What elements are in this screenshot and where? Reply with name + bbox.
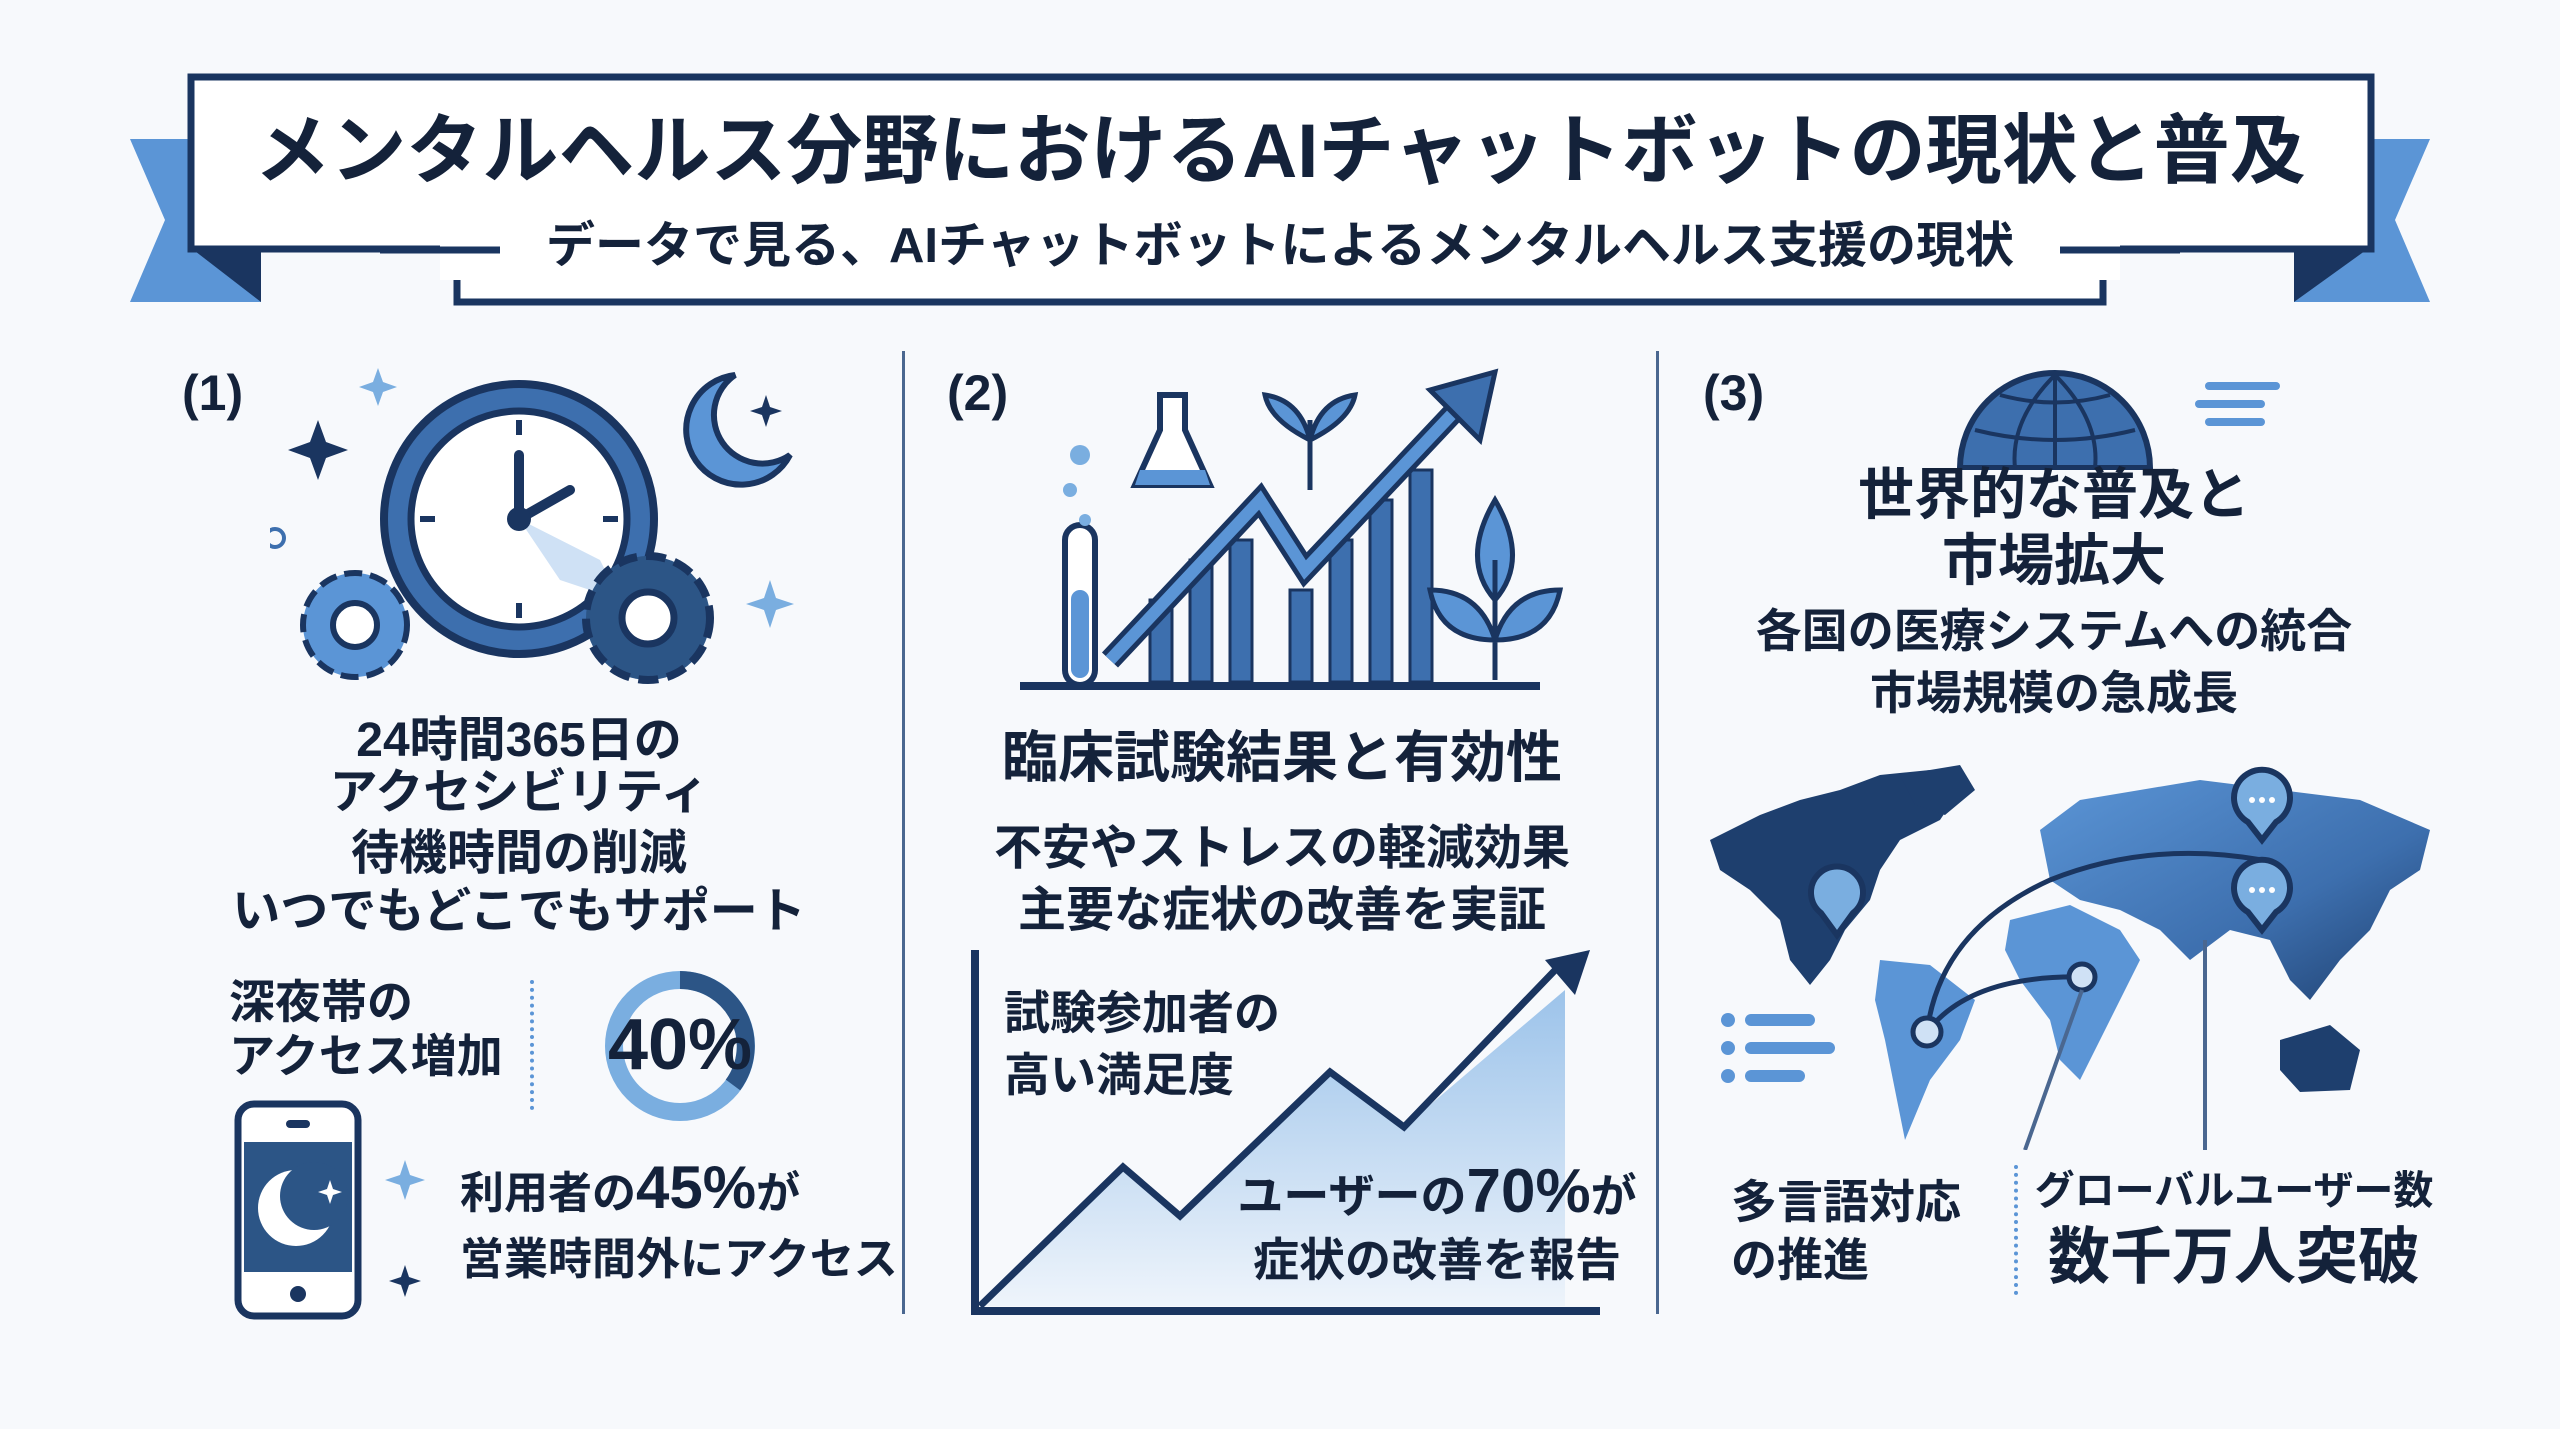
donut 40% xyxy=(605,971,755,1121)
subtitle: データで見る、AIチャットボットによるメンタルヘルス支援の現状 xyxy=(546,219,2014,273)
text: multilingual xyxy=(1731,1176,1961,1286)
text: wait time: 待機時間の削減 xyxy=(351,827,687,880)
panel 1 xyxy=(182,365,898,1320)
text: satisfaction: 高い満足度 xyxy=(1004,1049,1234,1101)
text: accessibility: アクセシビリティ xyxy=(330,766,708,819)
text: accessibility: 24時間365日の xyxy=(356,714,682,767)
heading: global spread xyxy=(1858,463,2250,592)
text: 45%: 利用者の45%が xyxy=(460,1154,800,1221)
text: multilingual: の推進 xyxy=(1731,1234,1869,1286)
text: satisfaction: 試験参加者の xyxy=(1004,987,1280,1039)
text: 70%: ユーザーの70%が xyxy=(1237,1157,1637,1226)
heading: global spread: 市場拡大 xyxy=(1942,529,2166,592)
text: accessibility xyxy=(330,714,708,819)
text: integration: 市場規模の急成長 xyxy=(1870,667,2238,719)
text: satisfaction xyxy=(1004,987,1280,1101)
text: late night xyxy=(229,976,503,1082)
text: global users: グローバルユーザー数 xyxy=(2035,1169,2433,1213)
icon: growth chart with flask and plants xyxy=(1020,368,1563,690)
text: late night: アクセス増加 xyxy=(229,1030,503,1082)
dividers xyxy=(902,351,905,1314)
text: integration: 各国の医療システムへの統合 xyxy=(1756,605,2352,657)
panel 2 xyxy=(947,365,1637,1315)
text: effects: 不安やストレスの軽減効果 xyxy=(994,822,1570,875)
text: 45% xyxy=(460,1154,898,1284)
icon: globe xyxy=(1957,370,2280,470)
text: multilingual: 多言語対応 xyxy=(1731,1176,1961,1228)
text: 45%: 営業時間外にアクセス xyxy=(460,1235,898,1284)
icon: list xyxy=(1721,1013,1835,1083)
icon: clock with gears xyxy=(270,368,794,684)
heading: clinical trials: 臨床試験結果と有効性 xyxy=(1002,726,1562,789)
text: wait time: いつでもどこでもサポート xyxy=(232,885,806,938)
number 3: (3) xyxy=(1703,365,1764,421)
number 2: (2) xyxy=(947,365,1008,421)
number 1: (1) xyxy=(182,365,243,421)
line chart xyxy=(971,950,1600,1315)
header ribbon xyxy=(130,74,2430,306)
text: 70%: 症状の改善を報告 xyxy=(1253,1234,1621,1286)
text: late night: 深夜帯の xyxy=(229,976,413,1028)
heading: global spread: 世界的な普及と xyxy=(1858,463,2250,526)
donut 40%: 40% xyxy=(608,1005,752,1085)
text: tens of millions: 数千万人突破 xyxy=(2048,1223,2420,1292)
panel 3 xyxy=(1703,365,2433,1295)
text: 70% xyxy=(1237,1157,1637,1286)
text: wait time xyxy=(232,827,806,938)
text: effects xyxy=(994,822,1570,937)
text: integration xyxy=(1756,605,2352,719)
text: effects: 主要な症状の改善を実証 xyxy=(1018,884,1546,937)
title: メンタルヘルス分野におけるAIチャットボットの現状と普及 xyxy=(254,109,2306,194)
world map xyxy=(1710,765,2430,1150)
icon: phone xyxy=(234,1100,425,1320)
